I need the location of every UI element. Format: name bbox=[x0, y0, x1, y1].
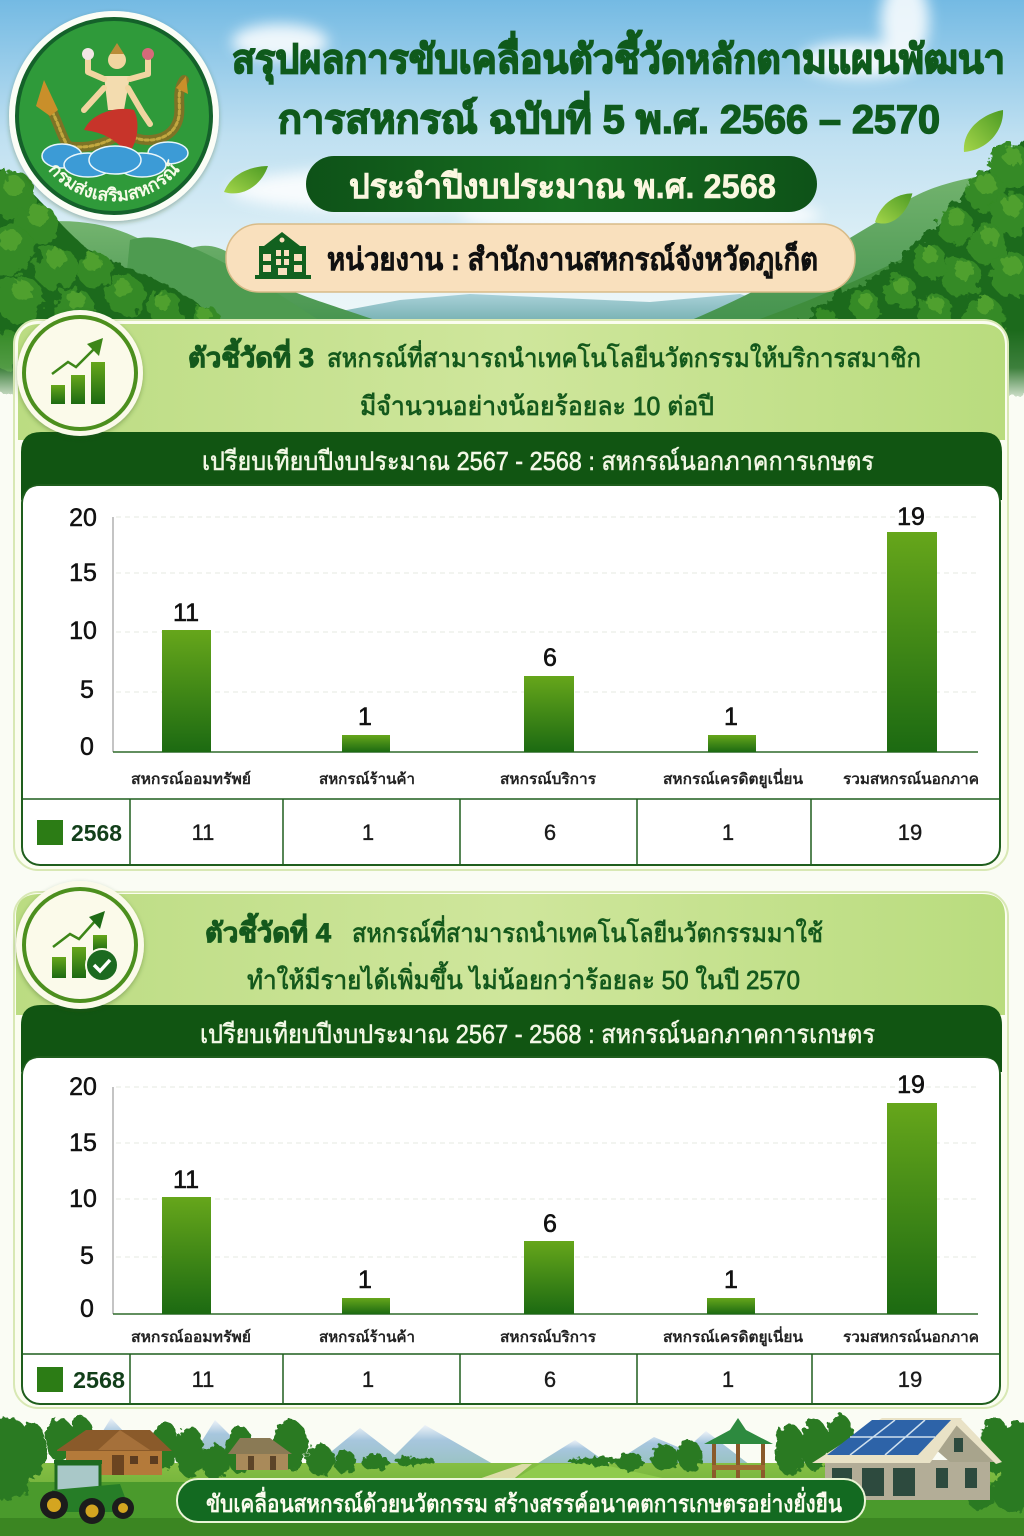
chart card bbox=[22, 1057, 1000, 1404]
agency pill: หน่วยงาน : สำนักงานสหกรณ์จังหวัดภูเก็ต bbox=[327, 240, 818, 279]
logo cloud base bbox=[42, 142, 188, 177]
tree lines bbox=[0, 1414, 1024, 1512]
comparison band: เปรียบเทียบปีงบประมาณ 2567 - 2568 : สหกรณ์นอกภาคการเกษตร bbox=[200, 1019, 875, 1049]
logo: cooperative promotion department seal bbox=[6, 10, 222, 226]
data table: indicator 3: 1 bbox=[362, 820, 374, 845]
fields and grass bbox=[0, 1463, 1024, 1536]
farm houses bbox=[57, 1430, 292, 1475]
icon: rising bars badge bbox=[17, 310, 143, 436]
logo deity figure bbox=[82, 43, 154, 152]
data table: indicator 4: 19 bbox=[898, 1367, 922, 1392]
comparison band: เปรียบเทียบปีงบประมาณ 2567 - 2568 : สหกรณ์นอกภาคการเกษตร bbox=[202, 446, 874, 476]
bar chart: indicator 4: รวมสหกรณ์นอกภาค bbox=[843, 1328, 979, 1346]
fiscal year pill: ประจำปีงบประมาณ พ.ศ. 2568 bbox=[349, 168, 776, 206]
bar chart: indicator 3: 1 bbox=[724, 703, 738, 731]
heading: indicator 4: สหกรณ์ที่สามารถนำเทคโนโลยีนวัตกรรมมาใช้ bbox=[352, 915, 823, 948]
bar chart: indicator 3: 19 bbox=[897, 503, 925, 531]
data table: indicator 4: 11 bbox=[192, 1367, 214, 1392]
panel: indicator 3 bbox=[14, 310, 1008, 870]
icon: bars with check badge bbox=[16, 881, 144, 1009]
heading: indicator 3 bbox=[188, 337, 921, 421]
bar chart: indicator 4: 20 bbox=[69, 1073, 97, 1101]
data table: indicator 4: 6 bbox=[544, 1367, 556, 1392]
data table: indicator 4: 1 bbox=[362, 1367, 374, 1392]
heading: indicator 3: สหกรณ์ที่สามารถนำเทคโนโลยีนวัตกรรมให้บริการสมาชิก bbox=[327, 340, 921, 373]
bar chart: indicator 4: 10 bbox=[69, 1185, 97, 1213]
title bbox=[232, 30, 1005, 142]
bar chart: indicator 4: 0 bbox=[80, 1295, 94, 1323]
bar chart: indicator 4: สหกรณ์เครดิตยูเนี่ยน bbox=[663, 1326, 804, 1347]
header scenery: sky, clouds, mountains and forests bbox=[0, 0, 1024, 425]
fiscal year pill bbox=[306, 156, 817, 212]
logo circular name: กรมส่งเสริมสหกรณ์ bbox=[48, 158, 180, 202]
gazebo bbox=[704, 1418, 773, 1478]
data table: indicator 3: 19 bbox=[898, 820, 922, 845]
bar chart: indicator 4 bbox=[69, 1071, 979, 1347]
tractor bbox=[40, 1460, 134, 1524]
bar chart: indicator 4: 15 bbox=[69, 1129, 97, 1157]
bar chart: indicator 4: สหกรณ์ออมทรัพย์ bbox=[131, 1328, 251, 1346]
distant mountains bbox=[85, 1418, 750, 1468]
heading: indicator 3: มีจำนวนอย่างน้อยร้อยละ 10 ต่อปี bbox=[360, 391, 714, 421]
heading: indicator 4 bbox=[205, 912, 823, 995]
title: การสหกรณ์ ฉบับที่ 5 พ.ศ. 2566 – 2570 bbox=[278, 91, 940, 142]
data table: indicator 3: 11 bbox=[192, 820, 214, 845]
bar chart: indicator 3: รวมสหกรณ์นอกภาค bbox=[843, 770, 979, 788]
icon: building bbox=[255, 232, 311, 279]
bar chart: indicator 3: 10 bbox=[69, 617, 97, 645]
bar chart: indicator 4: 11 bbox=[173, 1166, 199, 1194]
footer slogan banner: ขับเคลื่อนสหกรณ์ด้วยนวัตกรรม สร้างสรรค์อนาคตการเกษตรอย่างยั่งยืน bbox=[206, 1486, 843, 1518]
bar chart: indicator 3: 0 bbox=[80, 733, 94, 761]
floating leaves bbox=[224, 110, 1003, 224]
bar chart: indicator 4: 5 bbox=[80, 1242, 94, 1270]
agency pill bbox=[226, 224, 855, 292]
bar chart: indicator 4: 6 bbox=[543, 1210, 557, 1238]
heading: indicator 4: ทำให้มีรายได้เพิ่มขึ้น ไม่น้อยกว่าร้อยละ 50 ในปี 2570 bbox=[247, 961, 800, 995]
data table: indicator 3: 6 bbox=[544, 820, 556, 845]
bar chart: indicator 4: 19 bbox=[897, 1071, 925, 1099]
bar chart: indicator 4: 1 bbox=[358, 1266, 372, 1294]
comparison band bbox=[21, 1005, 1002, 1072]
bar chart: indicator 3: 6 bbox=[543, 644, 557, 672]
bar chart: indicator 4: 1 bbox=[724, 1266, 738, 1294]
bar chart: indicator 3: 20 bbox=[69, 504, 97, 532]
bar chart: indicator 3: สหกรณ์ร้านค้า bbox=[319, 770, 415, 788]
solar house bbox=[812, 1418, 1002, 1500]
footer slogan banner bbox=[177, 1479, 865, 1522]
data table: indicator 3: 1 bbox=[722, 820, 734, 845]
panel: indicator 4 bbox=[14, 881, 1008, 1408]
bar chart: indicator 4: สหกรณ์ร้านค้า bbox=[319, 1328, 415, 1346]
bar chart: indicator 3: 5 bbox=[80, 676, 94, 704]
bar chart: indicator 3: 11 bbox=[173, 599, 199, 627]
chart card bbox=[22, 485, 1000, 865]
data table: indicator 4: 2568 bbox=[73, 1367, 125, 1393]
bar chart: indicator 3 bbox=[69, 503, 979, 789]
comparison band bbox=[21, 432, 1002, 500]
bar chart: indicator 3: 15 bbox=[69, 559, 97, 587]
bar chart: indicator 3: 1 bbox=[358, 703, 372, 731]
data table: indicator 4: 1 bbox=[722, 1367, 734, 1392]
data table: indicator 4 bbox=[23, 1354, 999, 1403]
bar chart: indicator 4: สหกรณ์บริการ bbox=[500, 1328, 597, 1346]
bar chart: indicator 3: สหกรณ์ออมทรัพย์ bbox=[131, 770, 251, 788]
logo naga serpent bbox=[45, 80, 184, 147]
bar chart: indicator 3: สหกรณ์บริการ bbox=[500, 770, 597, 788]
footer scene bbox=[0, 1414, 1024, 1536]
data table: indicator 3: 2568 bbox=[71, 820, 122, 846]
heading: indicator 3: ตัวชี้วัดที่ 3 bbox=[188, 337, 314, 373]
bar chart: indicator 3: สหกรณ์เครดิตยูเนี่ยน bbox=[663, 768, 804, 789]
heading: indicator 4: ตัวชี้วัดที่ 4 bbox=[205, 912, 331, 948]
data table: indicator 3 bbox=[23, 799, 999, 864]
